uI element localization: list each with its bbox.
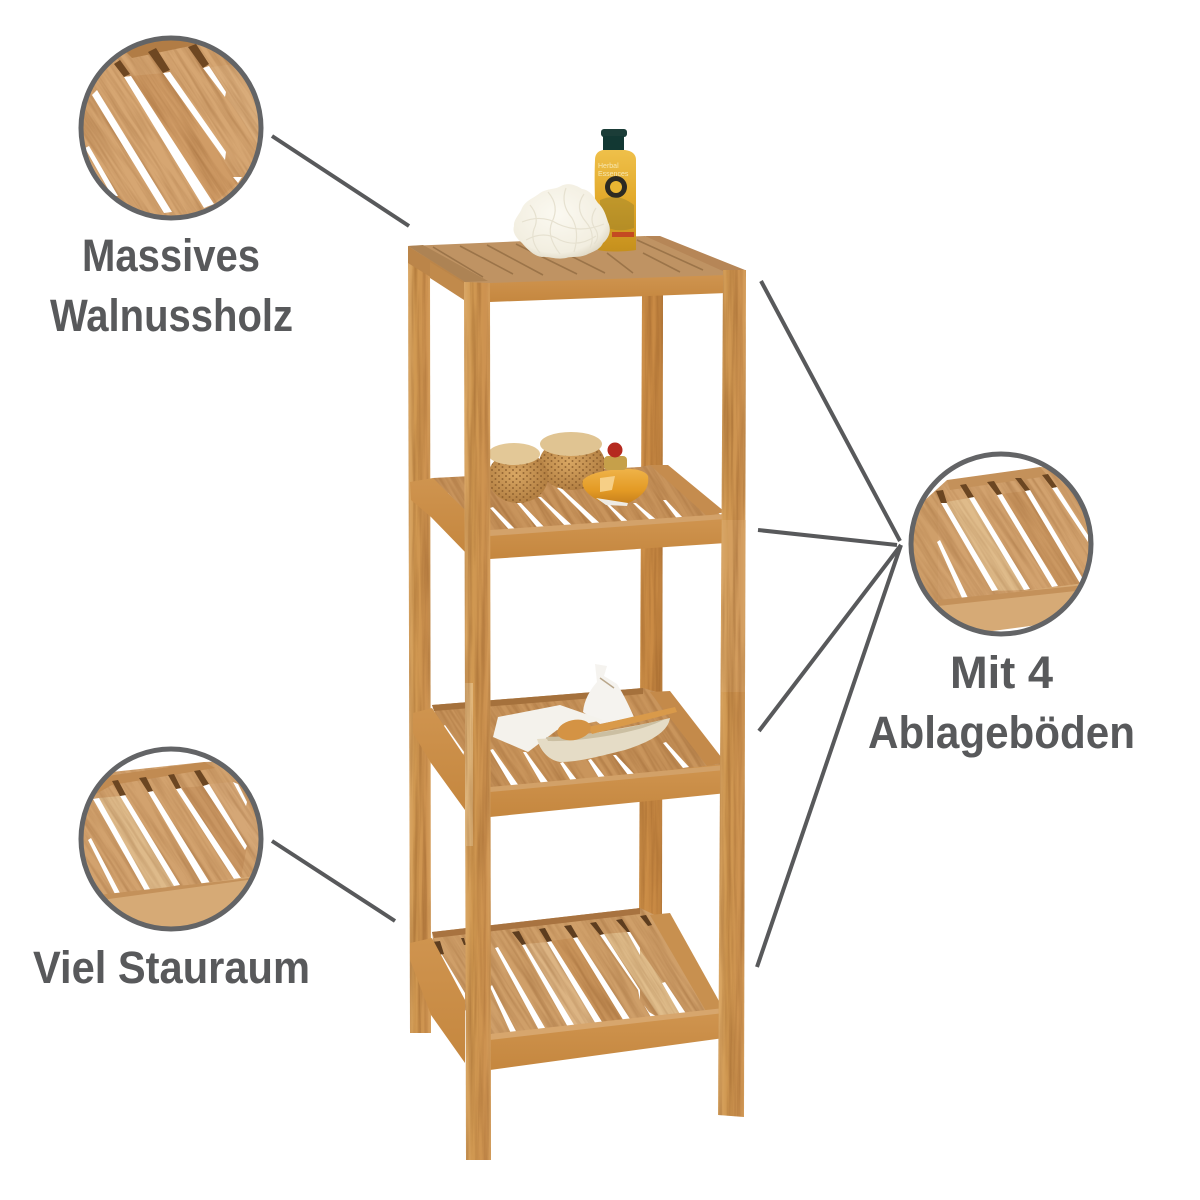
shampoo bottle: Herbal bbox=[598, 163, 619, 170]
basket back bbox=[539, 432, 605, 490]
detail circle: wood slats close-up bbox=[78, 36, 264, 220]
left rail bbox=[410, 938, 465, 1063]
label: Massives Walnussholz bbox=[50, 230, 293, 341]
callout: Mit 4 Ablageböden bbox=[869, 452, 1132, 758]
shampoo bottle bbox=[595, 129, 636, 252]
label: Massives Walnussholz: Massives bbox=[82, 230, 260, 281]
front legs bbox=[460, 268, 751, 1165]
left rail bbox=[410, 478, 465, 552]
label: Viel Stauraum: Viel Stauraum bbox=[33, 942, 310, 993]
leader lines: Mit 4 Ablageböden bbox=[757, 281, 901, 967]
front rail bbox=[490, 764, 727, 817]
detail circle: slats with front rail bbox=[78, 746, 264, 932]
spoon bbox=[555, 707, 677, 743]
leader line: Massives Walnussholz bbox=[272, 136, 409, 226]
label: Mit 4 Ablageböden: Ablageböden bbox=[868, 707, 1135, 758]
label: Mit 4 Ablageböden bbox=[868, 647, 1135, 758]
shelf 4 (bottom) bbox=[410, 908, 719, 1070]
front rail bbox=[490, 275, 727, 302]
left rail bbox=[413, 708, 465, 810]
leader line: Viel Stauraum bbox=[272, 841, 395, 921]
basket front bbox=[488, 443, 548, 503]
perfume bottle bbox=[582, 442, 648, 506]
front rail bbox=[490, 518, 726, 559]
label: Massives Walnussholz: Walnussholz bbox=[50, 290, 293, 341]
callout: Massives Walnussholz bbox=[50, 36, 292, 332]
label: Mit 4 Ablageböden: Mit 4 bbox=[950, 647, 1053, 698]
shelf 3 with tray, towel and sachet bbox=[413, 664, 720, 817]
shampoo bottle: Essences bbox=[598, 171, 629, 178]
callout: Viel Stauraum bbox=[33, 746, 308, 984]
shelf 1 (top) with bottle and pouf bbox=[408, 129, 745, 302]
front rail bbox=[490, 1012, 724, 1070]
shelf 2 with baskets and perfume bbox=[410, 432, 722, 559]
sachet bbox=[583, 664, 634, 724]
left rail bbox=[408, 246, 465, 298]
bath pouf bbox=[513, 184, 610, 259]
detail circle: shelf corner bbox=[908, 452, 1094, 636]
shelf unit bbox=[391, 129, 751, 1165]
towel bbox=[493, 705, 603, 752]
tray bbox=[537, 718, 670, 762]
back legs bbox=[405, 250, 666, 1040]
